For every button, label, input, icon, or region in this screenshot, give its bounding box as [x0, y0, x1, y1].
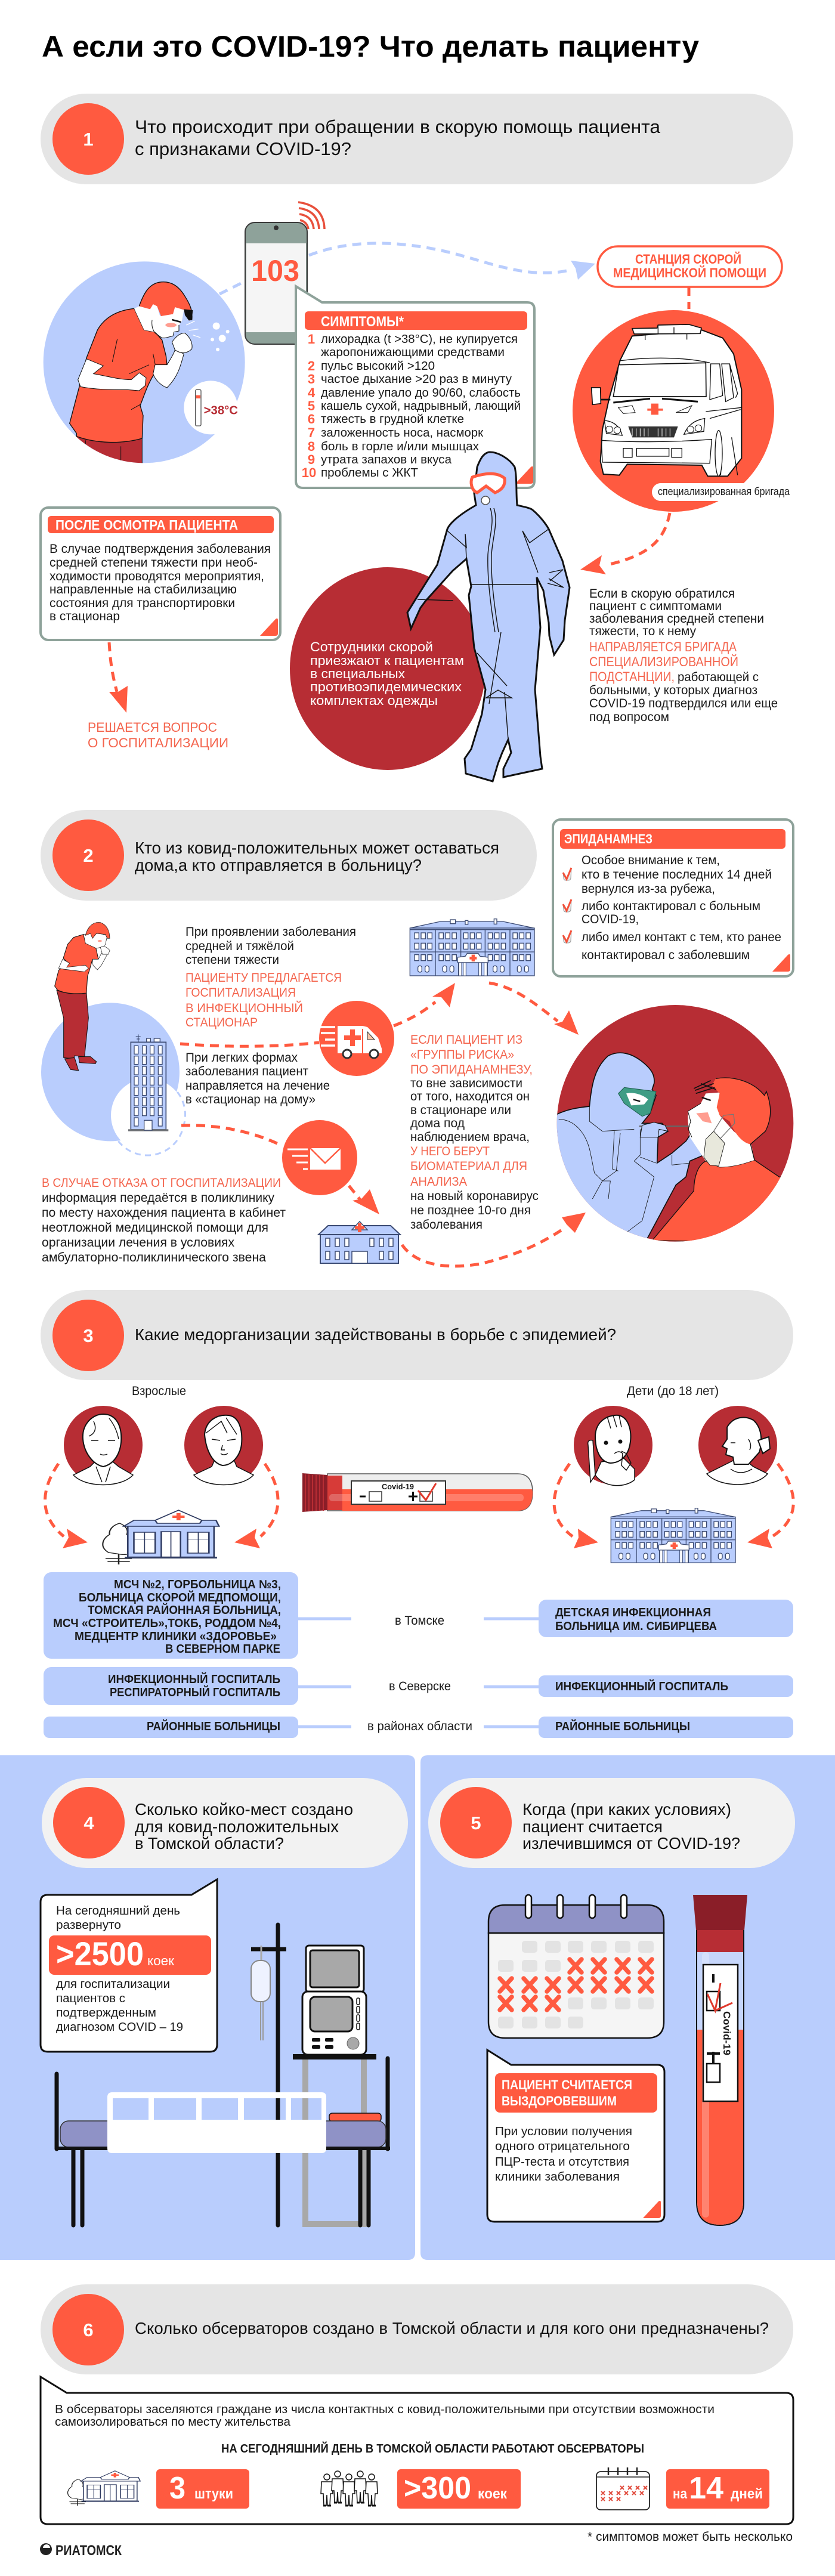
icon: envelope in red circle	[282, 1120, 357, 1195]
symptoms list: лихорадка (t >38°C), не купируется	[321, 333, 518, 346]
text block: risk group: на новый коронавирус	[410, 1189, 539, 1203]
icon: ambulance in red circle	[573, 310, 774, 512]
text block: specialised brigade: COVID-19 подтвердился или еще	[589, 697, 778, 710]
dashed arrow: ambulance to hospital	[394, 983, 455, 1026]
callout: beds deployed: пациентов с	[56, 1992, 125, 2005]
adult hospitals in Seversk	[44, 1667, 298, 1705]
number badge 2: 2	[83, 845, 94, 866]
header pill	[41, 1290, 793, 1380]
test label: Covid-19	[721, 2011, 732, 2055]
text block: risk group: ПО ЭПИДАНАМНЕЗУ,	[410, 1063, 533, 1077]
icon: phone dialing 103	[245, 202, 324, 344]
callout: beds deployed: На сегодняшний день	[56, 1904, 180, 1918]
intro text: самоизолироваться по месту жительства	[55, 2416, 291, 2429]
question text	[522, 1800, 740, 1853]
stat: 14 days: на	[673, 2486, 688, 2502]
adult hospitals in Seversk: ИНФЕКЦИОННЫЙ ГОСПИТАЛЬ	[108, 1672, 280, 1686]
icon: small calendar	[596, 2467, 650, 2510]
test label	[703, 1965, 738, 2101]
callout: beds deployed: развернуто	[56, 1919, 121, 1932]
question text: для ковид-положительных	[135, 1817, 339, 1836]
label: regional districts: в районах области	[367, 1720, 472, 1733]
question text: с признаками COVID-19?	[135, 138, 351, 159]
text block: risk group: «ГРУППЫ РИСКА»	[410, 1048, 514, 1062]
header pill	[42, 1778, 408, 1868]
epid text: Особое внимание к тем,	[582, 853, 720, 867]
adult district hospitals	[44, 1717, 298, 1738]
label: children: Дети (до 18 лет)	[627, 1384, 719, 1398]
dark red circle with text	[290, 567, 485, 770]
question text: дома,а кто отправляется в больницу?	[135, 856, 422, 874]
text block: risk group: не позднее 10-го дня	[410, 1204, 531, 1217]
portrait: baby	[574, 1406, 652, 1486]
station label: СТАНЦИЯ СКОРОЙ	[635, 252, 741, 267]
number badge 1	[52, 103, 124, 175]
number badge 4	[53, 1787, 125, 1858]
panel: epidemiological history	[553, 820, 793, 976]
panel: observatories	[41, 2377, 793, 2524]
text block: specialised brigade: больными, у которых диагноз	[589, 684, 757, 697]
after-exam text: В случае подтверждения заболевания	[50, 542, 271, 556]
callout: beds deployed: подтвержденным	[56, 2006, 156, 2020]
adult hospitals in Tomsk: ТОМСКАЯ РАЙОННАЯ БОЛЬНИЦА,	[88, 1603, 281, 1617]
section 3: question header	[41, 1290, 793, 1380]
symptoms list: 8	[308, 439, 315, 454]
goggles	[471, 474, 505, 493]
stat: 300 beds: коек	[478, 2486, 508, 2502]
children's district hospitals: РАЙОННЫЕ БОЛЬНИЦЫ	[555, 1719, 690, 1733]
children's hospital in Tomsk	[539, 1600, 793, 1637]
checkmarks	[563, 868, 571, 943]
dashed arrow: phone to station	[309, 243, 595, 280]
dashed arrow: child 1 to hospital	[554, 1464, 598, 1548]
question text: Что происходит при обращении в скорую помощь пациента	[135, 116, 661, 137]
adult hospitals in Tomsk	[44, 1572, 298, 1659]
section 1: question header	[41, 94, 793, 184]
text block: risk group: У НЕГО БЕРУТ	[410, 1145, 490, 1158]
icon: thermometer	[196, 389, 201, 426]
test label: Covid-19	[382, 1482, 414, 1491]
icon: infectious hospital	[410, 919, 534, 976]
text block: risk group: заболевания	[410, 1218, 483, 1232]
number badge 1: 1	[83, 129, 94, 150]
dashed arrow: adult 1 to clinic	[45, 1464, 88, 1548]
text block: risk group: наблюдением врача,	[410, 1130, 530, 1144]
after-exam text	[50, 542, 271, 623]
text block: refusal of hospitalization: организации лечения в условиях	[42, 1236, 235, 1250]
question text	[135, 1800, 353, 1853]
adult hospitals in Tomsk: МЕДЦЕНТР КЛИНИКИ «ЗДОРОВЬЕ»	[75, 1630, 277, 1643]
symptoms list: утрата запахов и вкуса	[321, 453, 452, 466]
text block: refusal of hospitalization	[42, 1176, 286, 1264]
icon: hospital bed	[55, 2058, 390, 2225]
portrait: girl	[698, 1406, 777, 1485]
panel: after examination	[41, 508, 280, 640]
text block: mild forms: в «стационар на дому»	[185, 1093, 316, 1106]
symptoms list: тяжесть в грудной клетке	[321, 413, 464, 426]
question text	[135, 839, 499, 874]
number badge 5: 5	[471, 1813, 481, 1833]
question text	[135, 116, 661, 159]
text block: mild forms: направляется на лечение	[185, 1079, 330, 1093]
text block: moderate and severe forms: степени тяжести	[185, 953, 279, 967]
symptoms list: 7	[308, 425, 315, 440]
question text: Сколько обсерваторов создано в Томской области и для кого они предназначены?	[135, 2319, 769, 2337]
question text: Какие медорганизации задействованы в борьбе с эпидемией?	[135, 1325, 616, 1344]
title: А если это COVID-19? Что делать пациенту	[42, 30, 699, 63]
logo: RIA Tomsk: РИАТОМСК	[55, 2543, 122, 2559]
symptoms list	[302, 332, 521, 480]
epid text: либо контактировал с больным	[582, 899, 760, 913]
symptoms list: 9	[308, 452, 315, 467]
recovered header: ПАЦИЕНТ СЧИТАЕТСЯ	[502, 2077, 632, 2092]
stat: 14 days	[666, 2469, 769, 2509]
icon: test tube	[302, 1473, 533, 1512]
section 6: question header	[41, 2284, 793, 2374]
brigade caption	[652, 483, 790, 501]
text block: specialised brigade: СПЕЦИАЛИЗИРОВАННОЙ	[589, 654, 738, 669]
text block: specialised brigade: работающей с	[678, 670, 759, 684]
dashed arrow: hospital to biomaterial	[489, 983, 579, 1035]
icon: IV stand and monitor	[251, 1925, 376, 2225]
city label: Seversk: в Северске	[389, 1680, 451, 1693]
goggles	[618, 1087, 656, 1117]
symptoms list: давление упало до 90/60, слабость	[321, 386, 521, 400]
symptoms list: 6	[308, 412, 315, 426]
epid header	[560, 829, 785, 849]
after-exam text: средней степени тяжести при необ-	[50, 556, 258, 570]
text block: moderate and severe forms: В ИНФЕКЦИОННЫЙ	[185, 1001, 303, 1015]
symptoms list: боль в горле и/или мышцах	[321, 440, 479, 453]
adult hospitals in Seversk: РЕСПИРАТОРНЫЙ ГОСПИТАЛЬ	[110, 1685, 280, 1699]
recovered text: клиники заболевания	[495, 2170, 620, 2184]
dark red circle with text: Сотрудники скорой	[310, 639, 433, 654]
epid text	[582, 853, 781, 962]
panel: symptoms	[296, 286, 534, 488]
text block: mild forms: заболевания пациент	[185, 1065, 308, 1078]
callout: beds deployed: диагнозом COVID – 19	[56, 2021, 183, 2034]
symptoms list: 3	[308, 372, 315, 386]
test label	[351, 1481, 446, 1504]
adult district hospitals: РАЙОННЫЕ БОЛЬНИЦЫ	[147, 1719, 280, 1733]
epid header: ЭПИДАНАМНЕЗ	[564, 831, 652, 846]
label: adults: Взрослые	[132, 1384, 186, 1398]
swab	[639, 1125, 690, 1127]
bed count: >2500	[56, 1935, 144, 1972]
recovered text: одного отрицательного	[495, 2140, 630, 2153]
icon: clinic small	[68, 2471, 140, 2506]
text block: risk group: БИОМАТЕРИАЛ ДЛЯ	[410, 1159, 527, 1173]
text block: specialised brigade: под вопросом	[589, 710, 669, 724]
icon: children's hospital	[611, 1508, 735, 1563]
children's hospital in Seversk	[539, 1675, 793, 1697]
dashed arrow: tower to envelope	[181, 1125, 282, 1146]
text block: risk group: дома под	[410, 1117, 465, 1130]
text block: refusal of hospitalization: информация передаётся в поликлинику	[42, 1191, 274, 1205]
logo: RIA Tomsk	[40, 2543, 122, 2559]
bed count: коек	[147, 1953, 174, 1968]
text block: specialised brigade	[589, 587, 778, 724]
station label	[598, 246, 782, 287]
question text: Кто из ковид-положительных может оставаться	[135, 839, 499, 857]
text block: refusal of hospitalization: неотложной медицинской помощи для	[42, 1221, 268, 1235]
adult hospitals in Tomsk: БОЛЬНИЦА СКОРОЙ МЕДПОМОЩИ,	[79, 1590, 281, 1604]
number badge 6: 6	[83, 2320, 94, 2340]
children's hospital in Seversk: ИНФЕКЦИОННЫЙ ГОСПИТАЛЬ	[555, 1679, 728, 1693]
text block: moderate and severe forms: средней и тяжёлой	[185, 939, 294, 953]
text block: risk group: в стационаре или	[410, 1103, 511, 1117]
section 5: question header	[428, 1778, 795, 1868]
epid text: вернулся из-за рубежа,	[582, 882, 715, 896]
epid text: либо имел контакт с тем, кто ранее	[582, 930, 781, 944]
callout: beds deployed: для госпитализации	[56, 1978, 170, 1991]
hospitalization note	[88, 720, 228, 750]
recovered text: При условии получения	[495, 2125, 632, 2138]
text block: mild forms	[185, 1051, 330, 1106]
text block: moderate and severe forms: ПАЦИЕНТУ ПРЕДЛАГАЕТСЯ	[185, 971, 342, 985]
after-exam text: в стационар	[50, 610, 120, 623]
stat: 300 beds: >300	[404, 2471, 471, 2506]
stat: 14 days: 14	[689, 2471, 723, 2506]
icon: signal arcs	[298, 202, 324, 229]
epid text: кто в течение последних 14 дней	[582, 868, 772, 882]
text block: refusal of hospitalization: по месту нахождения пациента в кабинет	[42, 1206, 286, 1220]
text block: specialised brigade: тяжести, то к нему	[589, 624, 696, 638]
text block: specialised brigade: ПОДСТАНЦИИ,	[589, 669, 675, 684]
number badge 3: 3	[83, 1325, 94, 1346]
symptoms list: 4	[308, 385, 316, 400]
recovered text: ПЦР-теста и отсутствия	[495, 2156, 629, 2169]
station label: МЕДИЦИНСКОЙ ПОМОЩИ	[613, 265, 766, 280]
header pill	[428, 1778, 795, 1868]
city label: Tomsk: в Томске	[395, 1614, 444, 1628]
epid text: COVID-19,	[582, 913, 639, 926]
recovered header	[495, 2073, 657, 2113]
portrait: adult man	[184, 1406, 263, 1485]
footnote: * симптомов может быть несколько	[587, 2530, 793, 2544]
number badge 5	[440, 1787, 512, 1858]
text block: risk group: от того, находится он	[410, 1090, 530, 1103]
adult hospitals in Tomsk: В СЕВЕРНОМ ПАРКЕ	[165, 1643, 280, 1656]
stat: 300 beds	[397, 2469, 521, 2509]
dashed arrow: child 2 to hospital	[747, 1464, 793, 1548]
text block: moderate and severe forms: При проявлении заболевания	[185, 925, 356, 939]
header pill	[41, 94, 793, 184]
icon: polyclinic	[318, 1221, 400, 1263]
temperature label: >38°C	[204, 403, 238, 417]
intro text: В обсерваторы заселяются граждане из числа контактных с ковид-положительными при отсутствии возможности	[55, 2403, 715, 2416]
recovered text	[495, 2125, 632, 2184]
text block: refusal of hospitalization: В СЛУЧАЕ ОТКАЗА ОТ ГОСПИТАЛИЗАЦИИ	[42, 1176, 281, 1190]
dashed arrow: brigade to patient	[580, 513, 670, 574]
question text: излечившимся от COVID-19?	[522, 1834, 740, 1853]
symptoms list: 5	[308, 398, 315, 413]
dashed arrow: patient to phone	[219, 282, 245, 294]
icon: people	[321, 2471, 378, 2506]
symptoms list: 2	[308, 358, 315, 373]
hospitalization note: РЕШАЕТСЯ ВОПРОС	[88, 720, 217, 735]
after-exam text: ходимости проводятся мероприятия,	[50, 570, 264, 583]
panel: section 5 background	[420, 1755, 835, 2260]
icon: coughing patient in blue circle	[44, 261, 245, 464]
children's district hospitals	[539, 1717, 793, 1738]
dashed arrow: patient to ambulance	[180, 1043, 319, 1046]
dark red circle with text: в специальных	[310, 666, 405, 681]
symptoms list: пульс высокий >120	[321, 360, 435, 373]
bed count	[49, 1935, 211, 1975]
icon: ambulance van in red circle	[316, 1001, 394, 1076]
portrait: adult woman	[64, 1406, 143, 1485]
question text: Сколько койко-мест создано	[135, 1800, 353, 1819]
text block: risk group: ЕСЛИ ПАЦИЕНТ ИЗ	[410, 1033, 522, 1047]
dashed arrow: envelope to polyclinic	[349, 1186, 379, 1214]
panel: section 4 background	[0, 1755, 415, 2260]
text block: refusal of hospitalization: амбулаторно-поликлинического звена	[42, 1251, 266, 1264]
text block: moderate and severe forms: ГОСПИТАЛИЗАЦИЯ	[185, 986, 296, 1000]
intro text	[55, 2403, 715, 2429]
hospitalization note: О ГОСПИТАЛИЗАЦИИ	[88, 735, 228, 750]
dashed arrow: polyclinic to biomaterial	[402, 1213, 586, 1266]
text block: risk group: то вне зависимости	[410, 1077, 522, 1090]
callout: beds deployed	[41, 1879, 217, 2052]
symptoms list: частое дыхание >20 раз в минуту	[321, 373, 512, 386]
text block: specialised brigade: НАПРАВЛЯЕТСЯ БРИГАДА	[589, 639, 737, 654]
after-exam text: направленные на стабилизацию	[50, 583, 237, 596]
callout: recovered patient	[487, 2050, 664, 2222]
icon: calendar	[488, 1895, 664, 2038]
icon: patient with tower block	[41, 922, 185, 1155]
text block: specialised brigade: заболевания средней степени	[589, 612, 764, 626]
text block: moderate and severe forms	[185, 925, 356, 1029]
dark red circle with text: комплектах одежды	[310, 693, 438, 708]
symptoms list: 10	[302, 465, 316, 480]
icon: vertical test tube	[693, 1895, 747, 2225]
connector lines	[298, 1619, 539, 1727]
recovered header: ВЫЗДОРОВЕВШИМ	[502, 2093, 617, 2108]
number badge 3	[52, 1300, 124, 1371]
stat: 3 units: 3	[169, 2471, 185, 2506]
symptoms header	[305, 311, 527, 330]
symptoms list: заложенность носа, насморк	[321, 426, 483, 440]
icon: clinic for adults	[103, 1510, 219, 1564]
stat: 14 days: дней	[731, 2486, 763, 2502]
dashed arrow: to hospitalization question	[109, 642, 128, 713]
number badge 4: 4	[84, 1813, 94, 1833]
icon: tower block	[128, 1034, 168, 1131]
symptoms list: проблемы с ЖКТ	[321, 466, 418, 480]
symptoms list: кашель сухой, надрывный, лающий	[321, 400, 521, 413]
stat: 3 units: штуки	[194, 2486, 233, 2502]
header pill	[41, 810, 537, 901]
after-exam text: состояния для транспортировки	[50, 596, 235, 610]
adult hospitals in Tomsk: МСЧ «СТРОИТЕЛЬ»,ТОКБ, РОДДОМ №4,	[53, 1617, 281, 1630]
symptoms header: СИМПТОМЫ*	[321, 314, 404, 330]
children's hospital in Tomsk: ДЕТСКАЯ ИНФЕКЦИОННАЯ	[555, 1606, 711, 1619]
section 4: question header	[42, 1778, 408, 1868]
symptoms list: 1	[308, 332, 315, 347]
text block: moderate and severe forms: СТАЦИОНАР	[185, 1016, 258, 1029]
children's hospital in Tomsk: БОЛЬНИЦА ИМ. СИБИРЦЕВА	[555, 1620, 717, 1633]
stat: 3 units	[156, 2469, 249, 2509]
text block: risk group: АНАЛИЗА	[410, 1175, 467, 1189]
epid text: контактировал с заболевшим	[582, 948, 750, 962]
text block: risk group	[410, 1033, 539, 1232]
subheading: НА СЕГОДНЯШНИЙ ДЕНЬ В ТОМСКОЙ ОБЛАСТИ РАБОТАЮТ ОБСЕРВАТОРЫ	[221, 2441, 644, 2456]
brigade caption: специализированная бригада	[658, 485, 790, 497]
dark red circle with text: противоэпидемических	[310, 679, 462, 694]
number badge 2	[52, 820, 124, 891]
adult hospitals in Tomsk: МСЧ №2, ГОРБОЛЬНИЦА №3,	[114, 1578, 281, 1591]
text block: specialised brigade: пациент с симптомами	[589, 599, 722, 613]
question text: Когда (при каких условиях)	[522, 1800, 731, 1819]
section 2: question header	[41, 810, 537, 901]
text block: specialised brigade: Если в скорую обратился	[589, 587, 735, 601]
text block: mild forms: При легких формах	[185, 1051, 298, 1065]
question text: пациент считается	[522, 1817, 663, 1836]
header pill	[41, 2284, 793, 2374]
number badge 6	[52, 2294, 124, 2365]
dashed arrow: adult 2 to clinic	[234, 1464, 278, 1548]
icon: swab test scene	[555, 1005, 795, 1242]
after-exam header: ПОСЛЕ ОСМОТРА ПАЦИЕНТА	[55, 517, 238, 533]
question text: в Томской области?	[135, 1834, 284, 1853]
icon: medic in protective suit	[407, 452, 570, 781]
dark red circle with text: приезжают к пациентам	[310, 653, 464, 668]
icon: phone dialing 103: 103	[251, 254, 299, 287]
symptoms list: жаропонижающими средствами	[321, 346, 505, 359]
